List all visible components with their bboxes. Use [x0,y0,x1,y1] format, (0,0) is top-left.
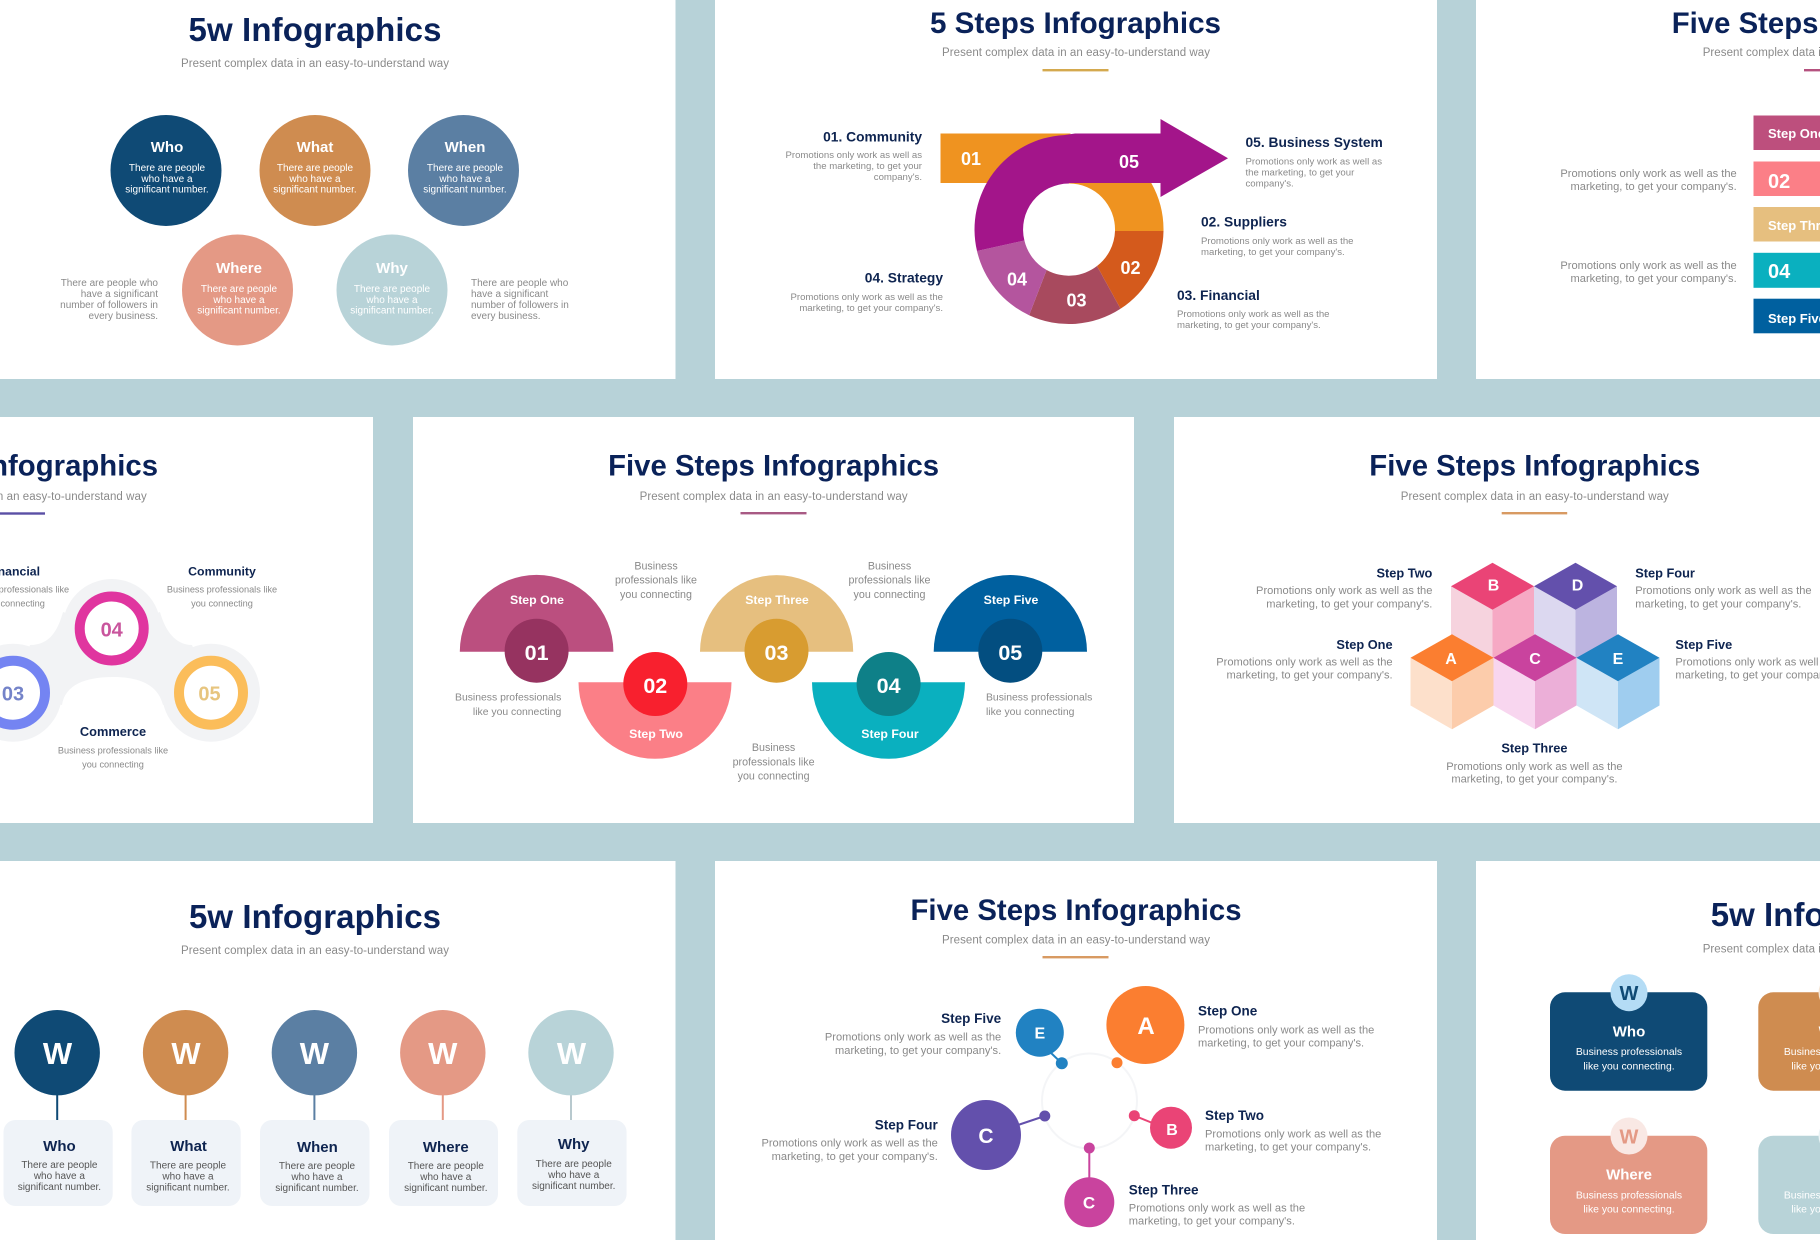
label: step one [1216,637,1393,681]
card: who [1550,974,1707,1091]
cube B: B [1488,578,1499,595]
underline [1804,69,1820,71]
side text left [60,278,158,322]
bubble: four: C [978,1125,994,1148]
label: commerce: Business professionals like [58,745,168,755]
label: suppliers: Promotions only work as well as the [1201,236,1354,247]
pin card: when: who have a [290,1172,343,1183]
bubble: E [1016,1009,1068,1069]
label: financial: Promotions only work as well as the [1177,309,1330,320]
text: lower note: Promotions only work as well as the [1560,260,1737,272]
card: why [1758,1118,1820,1234]
text: note between three and five: you connecting [854,589,925,601]
card: where: Where [1606,1166,1652,1183]
semicircle: step three: 03 [765,641,788,665]
bubble: A [1106,986,1184,1068]
pin card: where: There are people [408,1161,484,1172]
text: note between one and three: professionals like [615,574,697,586]
circle: what: significant number. [273,184,357,196]
pin card: where [389,1010,498,1206]
side text left: every business. [89,311,158,322]
panel: semicircles [413,417,1134,823]
pin card: what: W [171,1036,201,1071]
pin card: what [131,1010,241,1206]
label: community: Community [188,565,256,579]
label: step four: marketing, to get your company's. [1635,598,1801,610]
circle: who: Who [151,139,183,156]
label: step two [1205,1108,1381,1154]
pin card: what: There are people [150,1160,227,1172]
card: where: Business professionals [1576,1190,1682,1201]
arrow ring chart: 04 [1007,270,1027,290]
underline [740,512,806,514]
label: financial: marketing, to get your company's. [1177,320,1321,331]
card: what [1758,974,1820,1091]
bar: step one [1754,116,1820,150]
text: lower note [1560,260,1737,285]
label: step one: marketing, to get your company's. [1198,1038,1364,1050]
arrow ring chart: 05 [1119,152,1139,172]
bar: 02 [1754,162,1820,196]
arrow ring chart: 01 [961,149,981,169]
pin card: who: W [43,1036,73,1071]
label: step two: Step Two [1376,566,1433,581]
semicircle: step two [578,652,732,759]
label: step three: marketing, to get your company's. [1129,1215,1295,1227]
card: where [1550,1118,1707,1234]
cube C: C [1529,651,1541,668]
label: step two: marketing, to get your company's. [1205,1142,1371,1154]
label: financial [1177,288,1330,331]
pin card: who: Who [43,1138,76,1155]
circle: why [336,234,448,346]
semicircle: step four: 04 [877,674,901,698]
text: note between one and three [615,560,697,601]
pin card: what: significant number. [146,1182,230,1194]
circle: when: When [445,139,485,156]
label: community [786,130,923,183]
ring 04 [80,596,144,660]
text: note bottom centre [733,742,815,783]
side text right: every business. [471,311,540,322]
panel: 5w cards [1476,861,1820,1240]
circle: who: significant number. [125,184,209,196]
centre ring [1042,1054,1137,1148]
text: note right: Business professionals [986,693,1092,704]
pin card: where: who have a [419,1172,472,1183]
label: community: Business professionals like [167,585,277,595]
pin card: when: significant number. [275,1183,359,1194]
label: step four: Step Four [1635,566,1695,581]
subtitle: Present complex data in an easy-to-understand way [181,58,449,70]
pin card: where: significant number. [404,1183,487,1194]
semicircle: step five: 05 [998,641,1022,665]
semicircle: step four [812,652,965,759]
pin card: when: There are people [279,1161,356,1172]
pin card: who [4,1010,113,1206]
label: step five: Promotions only work as well as the [825,1032,1001,1044]
text: note left: like you connecting [473,707,562,718]
cube D [1534,563,1617,681]
pin card: why [517,1010,627,1206]
label: commerce: you connecting [82,759,144,769]
bar: 04: 04 [1768,261,1791,283]
cube A: A [1445,651,1457,668]
label: step five: Step Five [941,1011,1002,1026]
pin card: who: There are people [21,1160,98,1171]
label: strategy: 04. Strategy [865,270,943,286]
pin card: why: There are people [536,1159,612,1170]
ring 03: 03 [2,684,24,706]
circle: why: who have a [365,295,418,306]
circle: who: There are people [129,163,206,174]
subtitle: Present complex data in an easy-to-understand way [640,491,908,503]
underline [0,512,45,515]
panel: 5w circles [0,0,676,379]
circle: who [110,115,222,226]
semicircle: step four: Step Four [861,727,919,741]
text: note between three and five: professionals like [849,574,931,586]
label: business system: 05. Business System [1246,135,1383,150]
circle: why: Why [376,260,408,277]
bar: 02: 02 [1768,171,1790,193]
label: step two: Promotions only work as well as the [1205,1128,1381,1140]
pin card: why: W [557,1036,587,1071]
side text left: have a significant [81,289,158,300]
ring 05 [179,661,243,725]
underline [1042,956,1108,958]
text: upper note [1560,168,1737,193]
semicircle: step two: Step Two [629,727,683,741]
panel: 5 steps arrow ring [715,0,1437,379]
label: strategy [790,270,943,314]
label: business system: the marketing, to get your [1246,168,1355,178]
label: step two: marketing, to get your company's. [1266,598,1432,610]
bubble: four [951,1100,1050,1170]
semicircle: step five: Step Five [984,593,1038,607]
cube E: E [1613,651,1624,668]
label: community [167,565,277,609]
arrow ring chart [940,119,1228,324]
text: upper note: marketing, to get your company's. [1571,181,1737,193]
circle: where: Where [216,260,262,277]
label: step four: Promotions only work as well as the [1635,585,1812,597]
circle: when: who have a [438,174,491,185]
bar: step three [1754,207,1820,242]
text: note bottom centre: you connecting [738,771,810,783]
heading: Five Steps Infographics [910,894,1242,927]
label: strategy: marketing, to get your company's. [799,303,943,314]
circle: what: who have a [288,174,341,185]
label: step three [1446,741,1623,786]
bubble: three [1064,1142,1114,1227]
circle: when [408,115,519,226]
side text left: There are people who [61,278,158,289]
card: where: W [1620,1126,1639,1148]
cube E [1576,634,1660,729]
label: business system: Promotions only work as well as [1246,156,1382,168]
text: note left: Business professionals [455,693,561,704]
heading: Five Steps Infographics [608,450,939,482]
circle: what: What [297,139,333,156]
label: community: the marketing, to get your [813,161,923,172]
label: business system: company's. [1246,178,1294,190]
text: note left [455,693,562,718]
cube A [1410,634,1494,729]
circle: when: There are people [427,163,504,174]
label: step three: Step Three [1129,1182,1199,1197]
label: community: you connecting [191,599,253,609]
card: who: like you connecting. [1583,1061,1675,1072]
text: lower note: marketing, to get your company's. [1571,273,1737,285]
circle: where: significant number. [197,306,281,316]
pin card: where: W [428,1036,458,1071]
label: step one: Promotions only work as well as the [1216,657,1393,669]
text: upper note: Promotions only work as well as the [1560,168,1737,180]
circle: why: significant number. [350,306,434,316]
heading: 5 Steps Infographics [930,7,1221,40]
text: note between one and three: Business [634,560,678,572]
label: step four [1635,566,1812,610]
label: step one: Step One [1336,637,1393,652]
card: who: Who [1613,1024,1645,1041]
subtitle: Present complex data in an easy-to-understand way [942,47,1210,59]
label: step five [1675,637,1820,681]
heading: 5w Infographics [189,898,441,935]
semicircle: step one [460,575,613,683]
circle: why: There are people [354,284,431,295]
circle: when: significant number. [423,184,507,196]
panel: 5w pins and cards [0,861,676,1240]
pin card: who: who have a [33,1171,85,1182]
pin card: when [260,1010,370,1206]
semicircle: step one: 01 [525,641,549,665]
heading: 5w Infographics [188,11,442,48]
label: step three: Step Three [1501,741,1567,756]
bubble: B [1129,1107,1192,1149]
label: community: company's. [874,172,922,183]
side text left: number of followers in [60,300,158,311]
label: suppliers [1201,214,1354,258]
side text right: number of followers in [471,300,569,311]
panel: isometric cubes [1174,417,1820,823]
label: strategy: Promotions only work as well as the [790,292,943,303]
card: where: like you connecting. [1583,1205,1675,1216]
label: step two: Promotions only work as well as the [1256,585,1432,597]
text: note between three and five: Business [868,560,911,572]
label: step three: Promotions only work as well as the [1129,1203,1305,1215]
label: step five: Step Five [1675,637,1732,652]
subtitle: Present complex data in an easy-to-understand way [942,934,1210,946]
panel: linked rings [0,417,373,823]
pin card: who: significant number. [18,1182,101,1193]
pin card: why: Why [558,1136,590,1153]
label: step five: marketing, to get your company's. [835,1045,1001,1057]
pin card: where: Where [423,1139,469,1156]
panel: radial bubbles [715,861,1437,1240]
pin card: what: who have a [161,1172,214,1182]
label: commerce [58,724,168,769]
label: suppliers: 02. Suppliers [1201,214,1287,230]
side text right [471,278,569,322]
text: note bottom centre: Business [752,742,795,754]
semicircle: step one: Step One [510,593,564,607]
circle: what: There are people [277,163,354,174]
label: business system [1246,135,1383,190]
bar: 04 [1754,253,1820,288]
text: note bottom centre: professionals like [733,756,815,768]
label: community: Promotions only work as well as [786,150,922,161]
label: step four: marketing, to get your company's. [772,1151,938,1163]
arrow ring chart: 03 [1066,290,1087,310]
label: financial [0,565,69,609]
semicircle: step five [934,575,1087,683]
panel: five steps stacked bars [1476,0,1820,379]
label: step four: Promotions only work as well as the [761,1138,938,1150]
semicircle: step three: Step Three [745,593,809,607]
text: note right [986,693,1092,718]
ring 05: 05 [198,684,221,706]
text: note between one and three: you connecting [620,589,692,601]
semicircle: step two: 02 [643,674,667,698]
label: step four: Step Four [875,1117,939,1132]
label: commerce: Commerce [80,724,146,739]
text: note between three and five [849,560,931,601]
semicircle: step three [700,575,853,683]
pin card: what: What [170,1138,207,1155]
label: step one: Promotions only work as well as the [1198,1024,1374,1036]
side text right: There are people who [471,278,569,289]
bar: step five [1754,299,1820,333]
label: financial: 03. Financial [1177,288,1260,303]
pin card: when: W [300,1036,330,1071]
circle: where: who have a [212,295,265,306]
label: step four [761,1117,939,1163]
label: step five [825,1011,1002,1057]
bubble: three: C [1083,1194,1095,1212]
pin card: when: When [297,1139,338,1156]
circle: where: There are people [201,284,278,295]
circle: where [182,234,293,346]
ring 04: 04 [101,620,124,642]
label: step three: Promotions only work as well as the [1446,761,1623,773]
cube B [1451,563,1534,681]
label: step two [1256,566,1433,610]
side text right: have a significant [471,289,548,300]
underline [1042,69,1108,71]
bubble: B: B [1166,1122,1178,1139]
subtitle: Present complex data in an easy-to-understand way [181,945,449,957]
label: step three: marketing, to get your company's. [1451,774,1617,786]
cube C [1494,634,1576,729]
pin card: why: who have a [547,1170,600,1181]
bubble: A: A [1137,1013,1155,1040]
pin card: why: significant number. [532,1181,615,1192]
arrow ring chart: 02 [1120,258,1141,278]
label: community: 01. Community [823,130,922,144]
label: step two: Step Two [1205,1108,1264,1123]
bubble: E: E [1034,1026,1045,1042]
label: step three [1129,1182,1305,1227]
label: step one [1198,1004,1374,1050]
ring 03 [0,661,45,725]
label: step one: marketing, to get your company's. [1226,669,1393,681]
circle: what [260,115,370,226]
label: suppliers: marketing, to get your company's. [1201,247,1345,258]
subtitle: Present complex data in an easy-to-understand way [1401,491,1669,503]
heading: Five Steps Infographics [1369,450,1700,482]
grey connector blob [0,579,260,742]
card: who: W [1620,983,1639,1005]
label: step one: Step One [1198,1004,1258,1019]
cube D: D [1572,578,1583,595]
underline [1502,512,1567,514]
card: who: Business professionals [1576,1047,1682,1058]
circle: who: who have a [140,174,193,185]
text: note right: like you connecting [986,707,1075,718]
